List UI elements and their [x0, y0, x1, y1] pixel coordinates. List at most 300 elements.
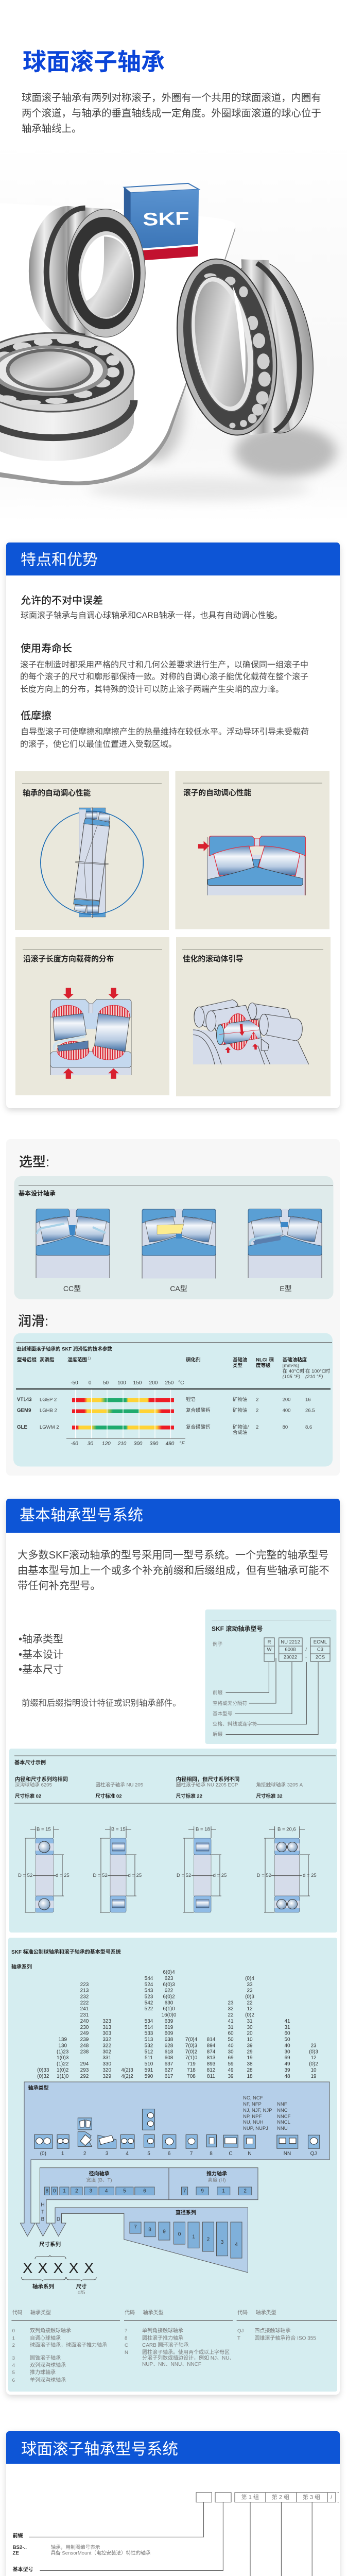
- table: bearing type codes: 单列深沟球轴承: [30, 2376, 66, 2383]
- platform shadow: [89, 359, 337, 501]
- series column N: 22: [247, 2000, 253, 2006]
- scale: Celsius: 100: [117, 1380, 126, 1386]
- feature: low friction: 的滚子，使它们以最佳位置进入受载区域。: [20, 740, 177, 749]
- box: bearing types with arrow: [21, 2082, 329, 2236]
- table rows: GLE: [17, 1425, 27, 1430]
- scale: Celsius: 250: [165, 1380, 174, 1386]
- block: prefixes: ZE: [12, 2550, 19, 2556]
- connectors and labels: 基本型号: [213, 1710, 232, 1717]
- feature: long life: 长度方向上的分布，其特殊的设计可以防止滚子两端产生尖峭的应力峰。: [20, 684, 284, 694]
- box: width/height series with arrow: 9: [201, 2189, 204, 2194]
- series column 8: 893: [207, 2061, 216, 2067]
- diagram: cylindrical roller bearing NU 205: d = 25: [128, 1873, 142, 1878]
- box: width/height series with arrow: 0: [53, 2189, 56, 2194]
- designation pattern XXXXX: 尺寸: [76, 2283, 87, 2290]
- series column C: 69: [228, 2055, 234, 2061]
- series column 7: 719: [187, 2061, 196, 2067]
- table: bearing type codes: 轴承类型: [30, 2309, 51, 2316]
- series column 7: 718: [187, 2067, 196, 2073]
- panel: bearing self-alignment: [15, 771, 169, 930]
- table header: 型号后缀: [17, 1357, 37, 1363]
- series column 5: 543: [145, 1988, 153, 1993]
- feature: misalignment: [21, 595, 282, 620]
- table: bearing type codes: 4: [12, 2363, 15, 2368]
- title: 球面滚子轴承: [23, 48, 165, 75]
- series column 2: 223: [80, 1981, 89, 1987]
- table: bearing type codes: 单列角接触球轴承: [142, 2327, 183, 2334]
- series column N: 29: [247, 2049, 253, 2055]
- table: bearing series numbers: (0)32: [37, 2073, 49, 2079]
- panel: load distribution: [15, 937, 169, 1095]
- series column 8: 811: [207, 2073, 215, 2079]
- series column C: 60: [228, 2030, 234, 2036]
- designation boxes: /: [331, 2495, 333, 2501]
- bearing type labels: C: [229, 2151, 233, 2157]
- series column 6: 6(0)3: [163, 1981, 175, 1987]
- series column 6: 622: [165, 1988, 173, 1993]
- series column NN: 50: [284, 2037, 290, 2042]
- scale: Fahrenheit: 120: [102, 1441, 111, 1447]
- series column 6: 630: [165, 2000, 173, 2006]
- example boxes: /: [305, 1647, 307, 1653]
- series column QJ: 19: [310, 2073, 317, 2079]
- series column C: 32: [228, 2006, 234, 2012]
- series column C: 30: [228, 2049, 234, 2055]
- table: bearing type codes: NUP、NN、NNU、NNCF: [142, 2361, 201, 2367]
- panel: grease table: 密封球面滚子轴承的 SKF 润滑脂的技术参数: [16, 1346, 112, 1352]
- series column 3: 331: [102, 2055, 111, 2061]
- table: bearing type codes: N: [125, 2349, 128, 2355]
- table: bearing type codes: 代码: [12, 2310, 23, 2316]
- series column 7: 7(0)4: [185, 2037, 198, 2042]
- scale: Fahrenheit: 480: [166, 1441, 175, 1447]
- designation pattern XXXXX: 轴承系列: [32, 2283, 54, 2290]
- panel: dimension examples: 尺寸标准 32: [256, 1793, 283, 1799]
- series column 5: 512: [145, 2049, 153, 2055]
- scale: Fahrenheit: 390: [150, 1441, 159, 1447]
- list: designation parts: •基本尺寸: [19, 1664, 63, 1675]
- table: bearing type codes: 分滚子列数或挡边设计，例如 NJ、NU、: [142, 2354, 234, 2361]
- feature: misalignment: 允许的不对中误差: [21, 595, 103, 606]
- diagram: cylindrical roller bearing NU 205: D = 52: [93, 1873, 108, 1878]
- bearing type labels: N: [248, 2151, 252, 2157]
- table: bearing type codes: 双列角接触球轴承: [30, 2327, 71, 2334]
- diagram: CA type: CA型: [170, 1284, 187, 1293]
- scale: Celsius: -50: [71, 1380, 78, 1386]
- diagram: CA type: [142, 1209, 216, 1293]
- panel: SKF designation example: 例子: [213, 1641, 223, 1648]
- panel: roller guidance: 佳化的滚动体引导: [183, 954, 244, 963]
- series column C: 22: [228, 2012, 234, 2018]
- series column NN: 48: [284, 2073, 290, 2079]
- series column 2: 294: [80, 2061, 89, 2067]
- series column 2: 231: [80, 2012, 89, 2018]
- series column 2: 293: [80, 2067, 89, 2073]
- panel: load distribution: 沿滚子长度方向载荷的分布: [23, 954, 114, 963]
- box: bearing types with arrow: NJ, NJF, NJP: [243, 2107, 272, 2113]
- box: bearing types with arrow: 轴承类型: [28, 2084, 49, 2091]
- bearing type labels: (0): [40, 2151, 46, 2157]
- table header: 类型: [233, 1362, 243, 1368]
- box: diameter series with arrow: 1: [192, 2234, 195, 2240]
- panel: roller self-alignment: 滚子的自动调心性能: [183, 788, 252, 798]
- heading bar: 基本轴承型号系统: 基本轴承型号系统: [20, 1507, 143, 1524]
- heading bar: 特点和优势: [6, 543, 340, 575]
- series column 6: 637: [165, 2061, 173, 2067]
- panel: SKF designation example: [205, 1609, 337, 1744]
- designation pattern XXXXX: X: [53, 2260, 63, 2277]
- box: bearing types with arrow: NNCL: [277, 2120, 290, 2125]
- table: bearing type codes: CARB 圆环滚子轴承: [142, 2341, 189, 2348]
- bearing type labels: 6: [168, 2151, 171, 2157]
- designation boxes: 第 1 组: [241, 2494, 259, 2501]
- box: diameter series with arrow: 3: [221, 2240, 224, 2245]
- series column 2: 292: [80, 2073, 89, 2079]
- series column NN: 49: [284, 2061, 290, 2067]
- box: diameter series with arrow: D: [57, 2216, 60, 2223]
- example boxes: -: [305, 1655, 307, 1660]
- table: bearing type codes: 球面滚子轴承，球面滚子推力轴承: [30, 2341, 107, 2348]
- series column N: (0)2: [245, 2012, 254, 2018]
- table: bearing type codes: 圆锥滚子轴承: [30, 2354, 61, 2361]
- intro paragraph: [22, 92, 321, 134]
- series column 7: 7(0)3: [185, 2043, 198, 2048]
- table header: NLGI 稠: [256, 1357, 274, 1363]
- feature: low friction: 自导型滚子可使摩擦和摩擦产生的热量维持在较低水平。浮动导环引导未受载荷: [21, 727, 309, 737]
- series column 4: 4(2)2: [121, 2073, 133, 2079]
- series column 7: 7(0)2: [185, 2049, 198, 2055]
- example boxes: [264, 1638, 330, 1662]
- table: bearing type codes: QJ: [237, 2328, 244, 2334]
- table rows: 复合磺酸钙: [186, 1408, 211, 1414]
- diagram: E type: E型: [280, 1284, 292, 1293]
- table header: 在 40°C时: [283, 1368, 305, 1375]
- scale: Fahrenheit: °F: [179, 1441, 185, 1447]
- table header: 稠化剂: [186, 1357, 201, 1363]
- series column 2: 240: [80, 2019, 89, 2024]
- series column 1: 139: [58, 2037, 67, 2042]
- series column QJ: (0)3: [309, 2049, 318, 2055]
- block: prefixes: BS2-..: [12, 2545, 27, 2550]
- series column 4: 4(2)3: [121, 2067, 133, 2073]
- diagram: guided roller: [193, 999, 309, 1064]
- bearing type labels: [40, 2151, 317, 2157]
- panel: SKF designation example: SKF 滚动轴承型号: [212, 1625, 263, 1632]
- designation pattern XXXXX: X: [84, 2260, 94, 2277]
- series column 5: 511: [145, 2055, 153, 2061]
- arrow: red load arrow: [198, 841, 209, 851]
- series column 8: 874: [207, 2049, 216, 2055]
- box: diameter series with arrow: 8: [148, 2227, 151, 2233]
- panel: dimension examples: 内径和尺寸系列均相同: [15, 1776, 68, 1783]
- diagram: deep groove ball bearing: [18, 1826, 70, 1912]
- diagram: tilted bearing in circle: [41, 807, 143, 918]
- table rows: GEM9: [17, 1408, 31, 1414]
- heading bar: 基本轴承型号系统: [6, 1499, 340, 1533]
- series column C: 23: [228, 2000, 234, 2006]
- series column 7: 708: [187, 2073, 196, 2079]
- panel: features and advantages: [6, 543, 340, 1108]
- table header: 基础油: [233, 1357, 248, 1363]
- designation pattern XXXXX: d/5: [78, 2290, 85, 2296]
- feature: long life: [20, 642, 308, 694]
- feature: long life: 使用寿命长: [21, 642, 72, 654]
- panel: grease table: [13, 1333, 333, 1466]
- table: bearing type codes: 3: [12, 2355, 15, 2361]
- series column N: 39: [247, 2043, 253, 2048]
- table header: 在 100°C时: [305, 1368, 331, 1375]
- box: width/height series with arrow: 4: [105, 2189, 108, 2194]
- series column N: 19: [247, 2055, 253, 2061]
- panel: dimension examples: 深沟球轴承 6205: [15, 1782, 52, 1788]
- box: bearing types with arrow: NC, NCF: [243, 2095, 263, 2101]
- diagram: cylindrical roller bearing NU 2205: d = 25: [213, 1873, 227, 1878]
- series column 1: (1)22: [57, 2061, 69, 2067]
- panel: dimension examples: 圆柱滚子轴承 NU 205: [95, 1782, 143, 1788]
- diagram: deep groove ball bearing: D = 52: [18, 1873, 32, 1878]
- box: diameter series with arrow: 直径系列: [176, 2209, 196, 2216]
- table header: [mm²/s]: [283, 1363, 299, 1368]
- table: bearing type codes: 代码: [125, 2310, 135, 2316]
- table rows: 400: [283, 1408, 290, 1414]
- scale: Fahrenheit: 300: [134, 1441, 143, 1447]
- block: prefixes: [12, 2532, 151, 2576]
- table rows: 锂皂: [186, 1396, 196, 1402]
- series column QJ: (0)2: [309, 2061, 318, 2067]
- series column 3: 322: [102, 2043, 111, 2048]
- box: width/height series with arrow: H: [41, 2202, 45, 2208]
- box: width/height series with arrow: 宽度 (B、T): [86, 2177, 112, 2183]
- box: diameter series with arrow: 9: [163, 2229, 166, 2235]
- table: bearing type codes: 推力球轴承: [30, 2369, 56, 2375]
- table header: 度等级: [256, 1362, 271, 1368]
- diagram: E type: [248, 1209, 322, 1293]
- panel: selection and lubrication: [6, 1139, 340, 1476]
- connectors: prefix to group 3: [29, 2502, 312, 2576]
- series column 3: 323: [102, 2019, 111, 2024]
- panel: dimension examples: 尺寸标准 22: [176, 1793, 202, 1799]
- intro paragraph: 轴承轴线上。: [22, 123, 81, 134]
- series column NN: 30: [284, 2049, 290, 2055]
- box: width/height series with arrow: T: [41, 2209, 44, 2215]
- series column 6: 623: [165, 1975, 173, 1981]
- diagram: CC type: [36, 1209, 110, 1293]
- series column 2: 222: [80, 2000, 89, 2006]
- series column QJ: 23: [310, 2043, 317, 2048]
- designation boxes: 第 3 组: [303, 2494, 320, 2501]
- designation pattern XXXXX: X: [68, 2260, 79, 2277]
- series column 1: 130: [58, 2043, 67, 2048]
- hero photo: SKF bearings and box: [0, 144, 347, 522]
- series column 3: 302: [102, 2049, 111, 2055]
- series column 6: 609: [165, 2030, 173, 2036]
- block: prefixes: 具备 SensorMount（电控安装法）特性的轴承: [50, 2550, 151, 2556]
- series column 6: 639: [165, 2019, 173, 2024]
- table: bearing type codes: 8: [125, 2335, 127, 2341]
- diagram: cylindrical roller bearing NU 2205: D = 52: [177, 1873, 191, 1878]
- box: width/height series with arrow: [36, 2168, 258, 2236]
- bearing type labels: 5: [147, 2151, 150, 2157]
- series column 5: 544: [145, 1975, 153, 1981]
- table rows: 16: [305, 1397, 311, 1402]
- list: designation parts: [19, 1633, 63, 1675]
- example boxes: ECML: [314, 1639, 327, 1645]
- box: width/height series with arrow: 径向轴承: [89, 2170, 110, 2177]
- series column N: 12: [247, 2006, 253, 2012]
- bearing type labels: 7: [190, 2151, 193, 2157]
- table rows: 8.6: [305, 1425, 312, 1430]
- bearing type labels: 4: [126, 2151, 129, 2157]
- series column 2: 248: [80, 2043, 89, 2048]
- series column C: 31: [228, 2024, 234, 2030]
- panel: spherical roller bearing designation system: [6, 2431, 340, 2576]
- series column 5: 542: [145, 2000, 153, 2006]
- bearing type labels: 2: [83, 2151, 86, 2157]
- block: prefixes: 基本型号: [12, 2566, 33, 2573]
- panel: basic designs: [14, 1176, 334, 1299]
- paragraph: designation intro: [18, 1549, 329, 1592]
- series column C: 39: [228, 2073, 234, 2079]
- series column N: 10: [247, 2037, 253, 2042]
- panel: dimension examples: 尺寸标准 02: [15, 1793, 41, 1799]
- series column 5: 534: [145, 2019, 153, 2024]
- table rows: 矿物油/: [233, 1424, 249, 1430]
- diagram: angular contact ball bearing 3205 A: d = 25: [303, 1873, 317, 1878]
- series column 6: 6(0)4: [163, 1969, 175, 1975]
- scale: Fahrenheit: 30: [88, 1441, 93, 1447]
- series column 5: 590: [145, 2073, 153, 2079]
- bearing: lying flat: [0, 333, 134, 461]
- series column C: 40: [228, 2043, 234, 2048]
- series column 7: 7(1)0: [185, 2055, 198, 2061]
- table rows: LGEP 2: [40, 1397, 57, 1402]
- feature: low friction: [20, 710, 309, 749]
- box: bearing types with arrow: NNCF: [277, 2113, 291, 2120]
- panel: dimension examples: [9, 1749, 337, 1933]
- table: bearing type codes: 圆柱滚子推力轴承: [142, 2334, 183, 2341]
- box: width/height series with arrow: 6: [143, 2189, 146, 2194]
- box: width/height series with arrow: 1: [63, 2189, 66, 2194]
- box: width/height series with arrow: 2: [75, 2189, 78, 2194]
- scale: Celsius: 200: [149, 1380, 158, 1386]
- diagram: angular contact ball bearing 3205 A: [257, 1826, 317, 1912]
- box: bearing types with arrow: NF, NFP: [243, 2101, 262, 2107]
- series column 6: 628: [165, 2043, 173, 2048]
- table: bearing type codes: 轴承类型: [256, 2309, 276, 2316]
- table: bearing type codes: 2: [12, 2342, 15, 2348]
- connectors and labels: 空格、斜线或连字符: [213, 1721, 257, 1727]
- diagram: angular contact ball bearing 3205 A: B = 20,6: [277, 1827, 296, 1832]
- bearing type labels: QJ: [310, 2151, 317, 2157]
- table header: 温度范围: [67, 1357, 87, 1363]
- panel: roller self-alignment: [175, 771, 329, 929]
- table: bearing type codes: T: [237, 2335, 240, 2341]
- diagram: angular contact ball bearing 3205 A: D = 52: [257, 1873, 271, 1878]
- series column NN: 41: [284, 2019, 290, 2024]
- bearing: standing left: [29, 206, 145, 337]
- series column 8: 894: [207, 2043, 216, 2048]
- list: designation parts: •轴承类型: [19, 1633, 63, 1645]
- series column 2: 239: [80, 2037, 89, 2042]
- heading: 润滑: 润滑:: [18, 1313, 48, 1329]
- designation pattern XXXXX: X: [23, 2260, 32, 2277]
- block: prefixes: 前缀: [12, 2532, 23, 2539]
- example boxes: W: [267, 1647, 272, 1653]
- diagram: cylindrical roller bearing NU 2205: B = 18: [196, 1827, 210, 1832]
- scale: Celsius: 0: [89, 1380, 92, 1386]
- bearing type labels: NN: [284, 2151, 291, 2157]
- panel: dimension examples: 圆柱滚子轴承 NU 2205 ECP: [176, 1782, 238, 1788]
- diagram: deep groove ball bearing: d = 25: [56, 1873, 70, 1878]
- feature: low friction: 低摩擦: [21, 710, 51, 722]
- scale: Fahrenheit: 210: [117, 1441, 127, 1447]
- table: bearing type codes: 圆锥滚子轴承符合 ISO 355: [254, 2334, 316, 2341]
- series column C: 49: [228, 2067, 234, 2073]
- bearing type icons: [34, 2109, 320, 2148]
- series column N: 23: [247, 1988, 253, 1993]
- designation boxes: [196, 2493, 339, 2502]
- table rows: 2: [256, 1397, 258, 1402]
- panel: dimension examples: 内径相同，但尺寸系列不同: [176, 1776, 239, 1783]
- connectors and labels: 后缀: [213, 1731, 223, 1737]
- series column 5: 522: [145, 2006, 153, 2012]
- series column 2: 241: [80, 2006, 89, 2012]
- series column 6: 6(0)2: [163, 1994, 175, 1999]
- series column 5: 532: [145, 2043, 153, 2048]
- table: bearing type codes: C: [125, 2342, 128, 2348]
- designation pattern XXXXX: 尺寸系列: [39, 2241, 61, 2247]
- heading: 选型: 选型:: [19, 1154, 49, 1170]
- box: width/height series with arrow: 5: [123, 2189, 126, 2194]
- diagram: load distribution on rollers: [50, 988, 131, 1079]
- series column 5: 591: [145, 2067, 153, 2073]
- table: bearing series numbers: (0)33: [37, 2067, 49, 2073]
- paragraph: designation intro: 带任何补充型号。: [18, 1580, 101, 1592]
- diagram: CC type: CC型: [63, 1284, 81, 1293]
- scale: Celsius: 50: [103, 1380, 109, 1386]
- example boxes: NU 2212: [281, 1639, 300, 1645]
- series column 3: 332: [102, 2037, 111, 2042]
- series column NN: 69: [284, 2055, 290, 2061]
- series column N: 18: [247, 2073, 253, 2079]
- table rows: 合成油: [233, 1429, 248, 1435]
- box: width/height series with arrow: 推力轴承: [206, 2170, 227, 2177]
- panel: designation system for metric bearings: 轴承系列: [11, 1963, 32, 1970]
- series column 6: 608: [165, 2055, 173, 2061]
- table rows: [17, 1396, 315, 1435]
- series column NN: 40: [284, 2043, 290, 2048]
- series column 2: 230: [80, 2024, 89, 2030]
- series column N: 33: [247, 1981, 253, 1987]
- box: width/height series with arrow: 8: [46, 2189, 49, 2194]
- scale: Fahrenheit: [71, 1441, 185, 1447]
- table header: (105 °F): [283, 1374, 300, 1380]
- series column 5: 510: [145, 2061, 153, 2067]
- heading bar: 特点和优势: 特点和优势: [21, 551, 98, 569]
- arrows: load arrows: [63, 988, 119, 1079]
- table: bearing type codes: [11, 2309, 337, 2383]
- table rows: 矿物油: [233, 1396, 248, 1402]
- series column 8: 813: [207, 2055, 216, 2061]
- series column 3: 320: [102, 2067, 111, 2073]
- series column 5: 533: [145, 2030, 153, 2036]
- table: bearing type codes: 双列深沟球轴承: [30, 2362, 66, 2368]
- series column 6: 16(0)0: [162, 2012, 177, 2018]
- series column N: 38: [247, 2061, 253, 2067]
- series column 3: 303: [102, 2030, 111, 2036]
- connectors and labels: 空格或无分隔符: [213, 1700, 248, 1706]
- series column 1: 1(0)3: [57, 2055, 69, 2061]
